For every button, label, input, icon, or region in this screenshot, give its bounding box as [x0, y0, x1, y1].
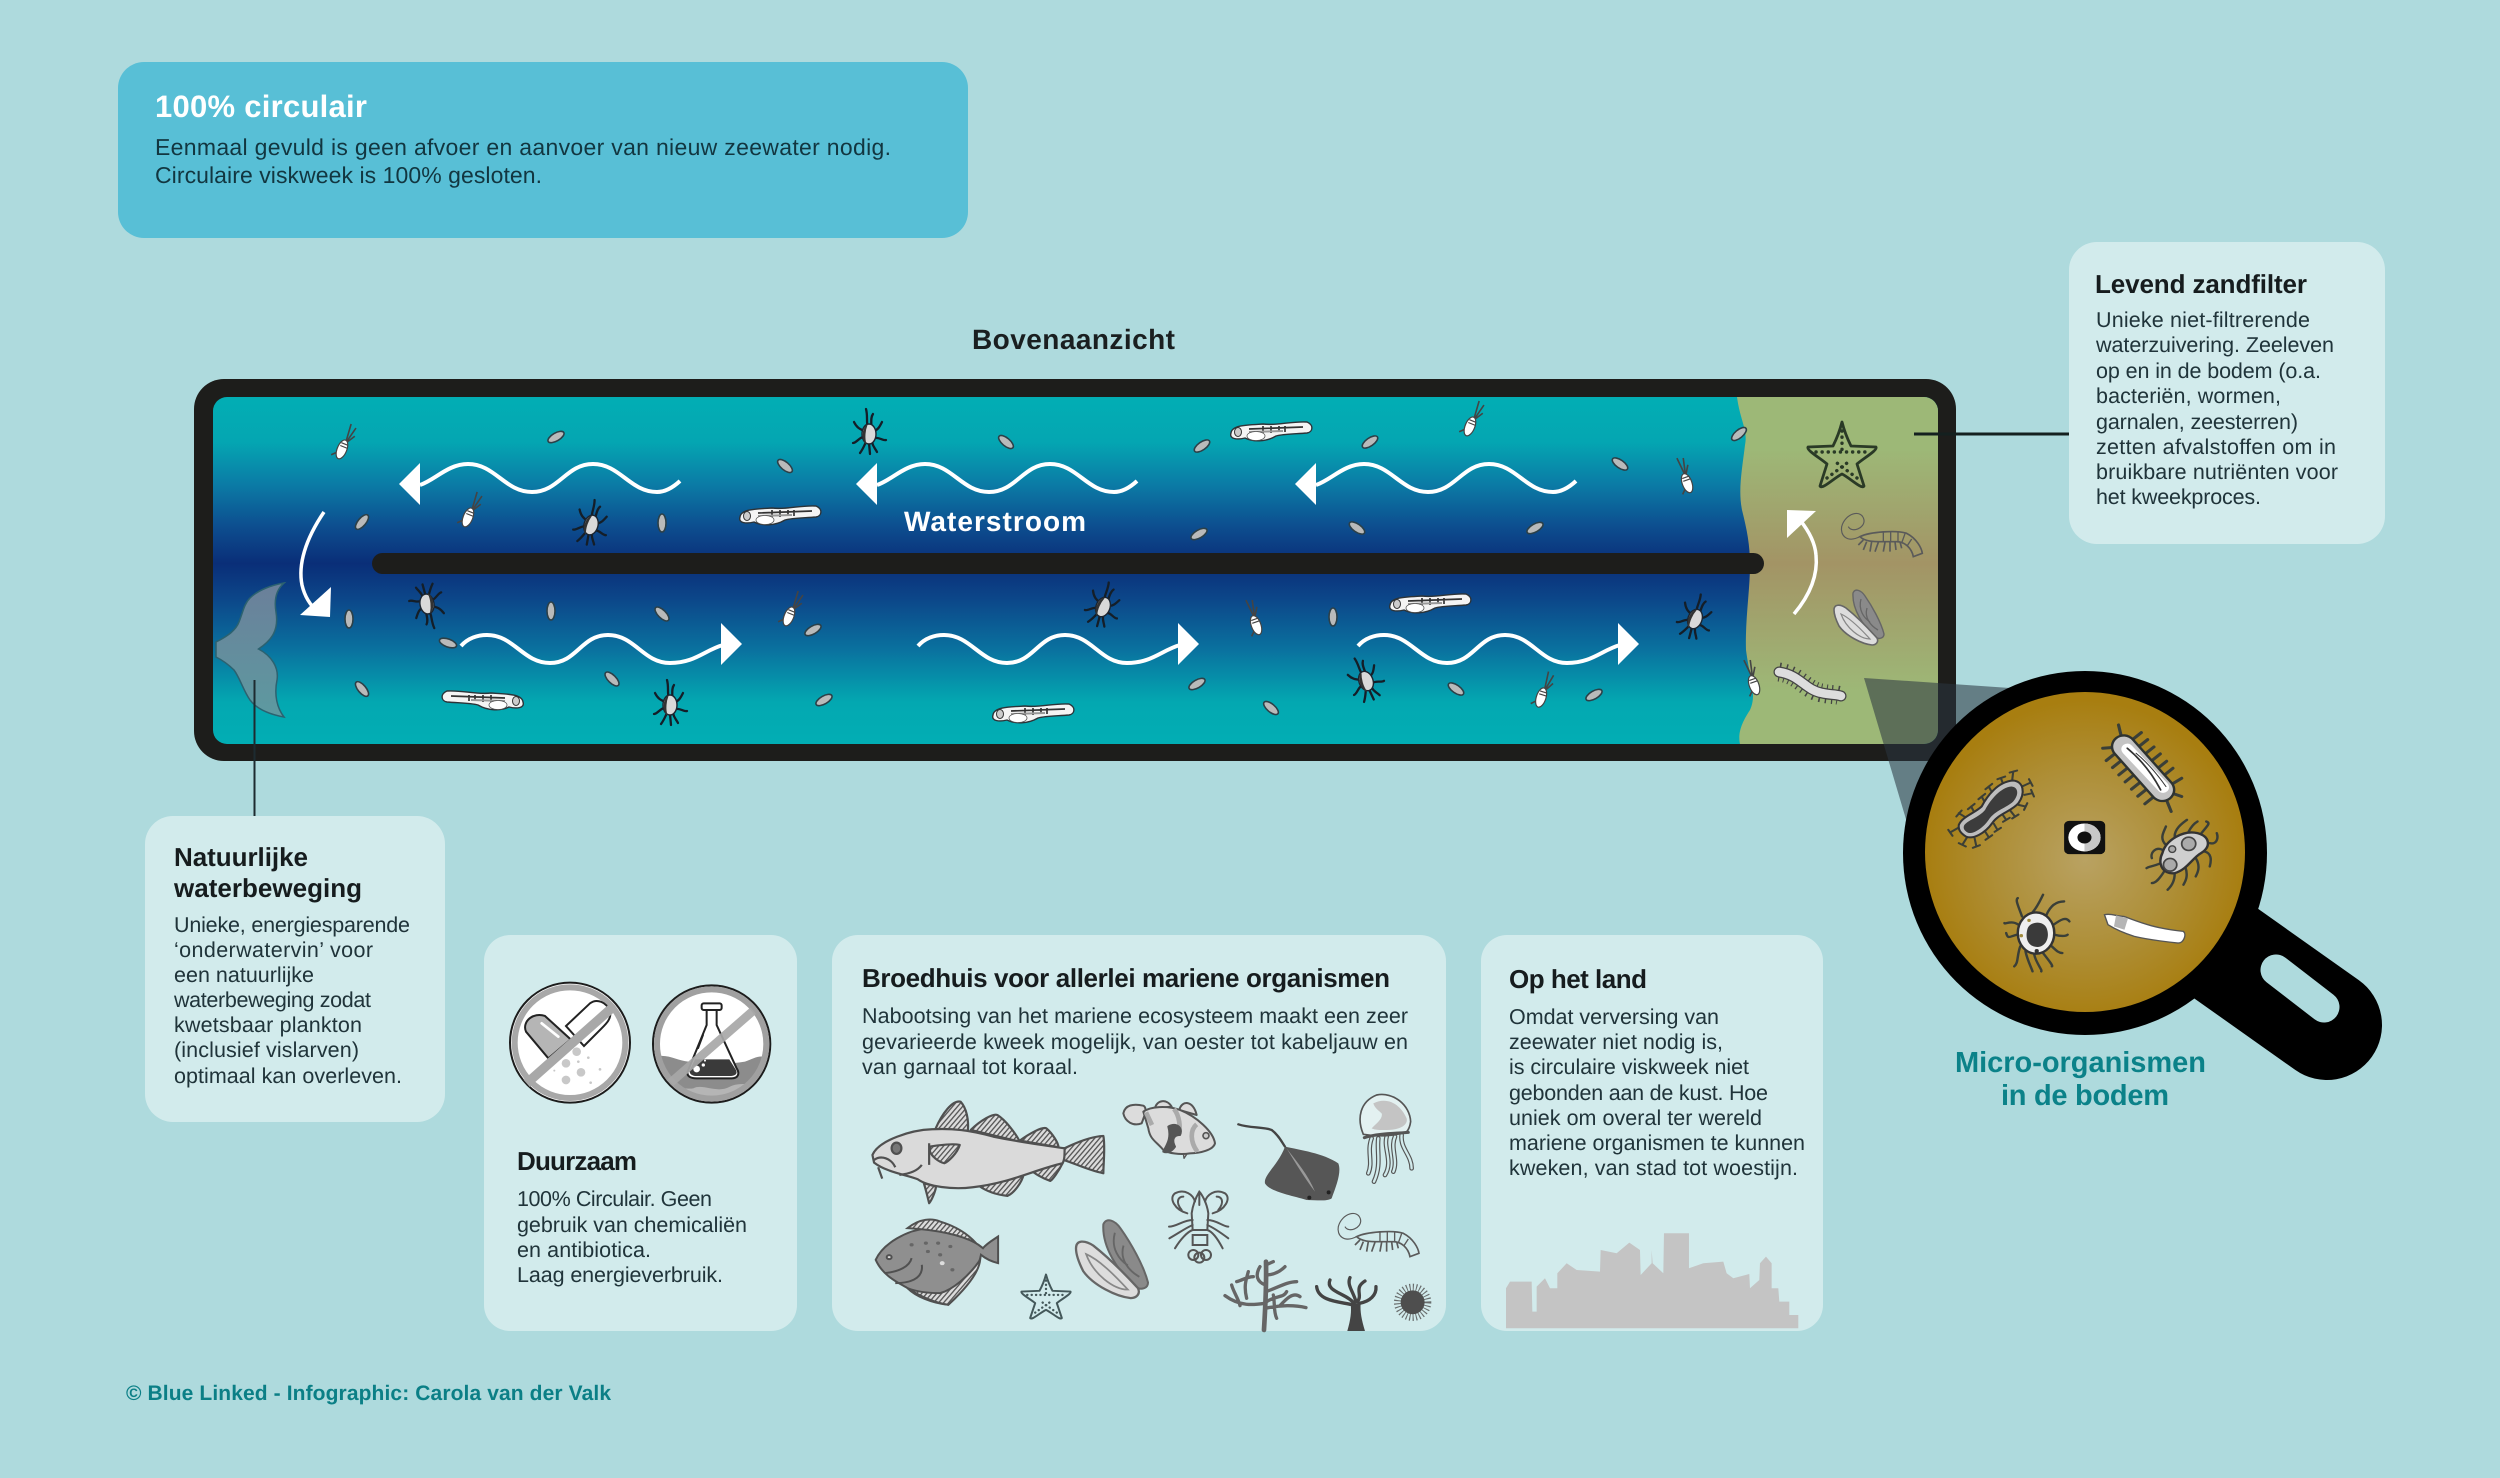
jellyfish	[1360, 1094, 1412, 1182]
text: circulair description: Circulaire viskweek is 100% gesloten.	[155, 162, 542, 188]
body text: (inclusief vislarven)	[174, 1038, 359, 1062]
icon: underwater fin	[216, 583, 284, 717]
body text: op en in de bodem (o.a.	[2096, 359, 2321, 383]
mussel	[1076, 1220, 1148, 1298]
body text: kweken, van stad tot woestijn.	[1509, 1156, 1798, 1180]
plankton: seeds	[345, 425, 1748, 717]
arrows: bottom row flow	[461, 623, 1639, 665]
label: Micro-organismen in de bodem: Micro-organismen	[1955, 1047, 2206, 1079]
body text: waterbeweging zodat	[173, 988, 371, 1012]
body text: uniek om overal ter wereld	[1509, 1106, 1762, 1130]
microbe: amoeba	[2004, 895, 2069, 971]
lobster	[1169, 1192, 1228, 1263]
icon: shrimp	[1841, 513, 1922, 557]
heading: Bovenaanzicht: Bovenaanzicht	[972, 324, 1175, 355]
heading: Natuurlijke	[174, 842, 308, 872]
body text: een natuurlijke	[174, 963, 314, 987]
label: Waterstroom: Waterstroom	[904, 506, 1086, 537]
plankton: fish larvae	[442, 422, 1471, 723]
microbe: dumbbell	[1948, 771, 2034, 848]
icon: worm	[1779, 672, 1841, 696]
body text: kwetsbaar plankton	[174, 1013, 362, 1037]
body text: bruikbare nutriënten voor	[2096, 460, 2338, 484]
panel: Natuurlijke waterbeweging	[145, 816, 445, 1122]
connector line: sand to label	[1914, 432, 2070, 436]
microbes	[1948, 725, 2217, 971]
body text: zeewater niet nodig is,	[1509, 1030, 1723, 1054]
marine organisms: fish	[872, 1102, 1104, 1305]
body text	[173, 913, 410, 1088]
label: Micro-organismen in de bodem: in de bodem	[2001, 1080, 2169, 1112]
panel: Duurzaam	[484, 935, 797, 1331]
magnifier	[1903, 671, 2327, 1035]
icon: mussel	[1834, 590, 1884, 645]
center lens icon	[2064, 821, 2105, 854]
body text: gebruik van chemicaliën	[517, 1213, 747, 1237]
panel: Broedhuis	[832, 935, 1446, 1331]
sand filter zone	[1737, 397, 1938, 744]
body text: en antibiotica.	[517, 1238, 651, 1262]
heading: Levend zandfilter	[2095, 269, 2307, 299]
heading: Duurzaam	[517, 1146, 637, 1176]
coral tree	[1317, 1278, 1376, 1331]
heading: waterbeweging	[173, 873, 362, 903]
body text: het kweekproces.	[2096, 485, 2261, 509]
heading	[173, 842, 362, 903]
coral branching	[1225, 1262, 1306, 1330]
body text: gevarieerde kweek mogelijk, van oester tot kabeljauw en	[862, 1030, 1408, 1054]
body text: garnalen, zeesterren)	[2096, 410, 2298, 434]
label: Micro-organismen in de bodem	[1955, 1047, 2206, 1112]
body text: Omdat verversing van	[1509, 1005, 1719, 1029]
arrows: top row flow	[399, 463, 1576, 505]
center wall	[372, 553, 1764, 574]
body text: 100% Circulair. Geen	[517, 1187, 712, 1211]
shrimp	[1338, 1213, 1419, 1257]
clownfish	[1123, 1101, 1215, 1158]
flounder	[876, 1220, 998, 1305]
body text: Nabootsing van het mariene ecosysteem maakt een zeer	[862, 1004, 1408, 1028]
footer credit: © Blue Linked - Infographic: Carola van der Valk	[126, 1382, 611, 1405]
text: circulair description: Eenmaal gevuld is geen afvoer en aanvoer van nieuw zeewater nodig.	[155, 134, 891, 160]
body text: gebonden aan de kust. Hoe	[1509, 1081, 1768, 1105]
body text: Unieke niet-filtrerende	[2096, 308, 2310, 332]
microbe: kidney	[2147, 820, 2217, 890]
body text: bacteriën, wormen,	[2096, 384, 2281, 408]
body text	[517, 1187, 747, 1287]
heading: Op het land	[1509, 964, 1647, 994]
icon: no antibiotics	[510, 983, 630, 1103]
plankton: spiders	[407, 409, 1720, 725]
body text: waterzuivering. Zeeleven	[2095, 333, 2334, 357]
body text	[2095, 308, 2338, 509]
marine organisms: small creatures	[1123, 1094, 1427, 1331]
handle	[2190, 928, 2327, 1025]
icon: no chemicals	[653, 985, 770, 1110]
connector line: fin to label	[254, 680, 256, 816]
city skyline	[1506, 1233, 1798, 1328]
panel: 100% circulair	[118, 62, 968, 238]
body text	[1509, 1005, 1805, 1180]
body text: is circulaire viskweek niet	[1509, 1055, 1749, 1079]
plankton: copepods	[331, 398, 1764, 709]
body text: Laag energieverbruik.	[517, 1263, 723, 1287]
arrow: right curve	[1787, 510, 1816, 614]
body text: Unieke, energiesparende	[174, 913, 410, 937]
body text: ‘onderwatervin’ voor	[174, 938, 373, 962]
heading: Broedhuis voor allerlei mariene organismen	[862, 963, 1390, 993]
sea urchin	[1399, 1288, 1427, 1316]
body text: van garnaal tot koraal.	[862, 1055, 1078, 1079]
text: circulair description	[155, 134, 891, 188]
panel: Op het land	[1481, 935, 1823, 1331]
microbe: white worm	[2104, 914, 2185, 943]
body text: optimaal kan overleven.	[174, 1064, 402, 1088]
arrow: left curve	[300, 512, 331, 617]
cod	[872, 1102, 1104, 1203]
icon: starfish	[1808, 422, 1876, 487]
starfish	[1021, 1275, 1071, 1319]
panel: Levend zandfilter	[2069, 242, 2385, 544]
magnifier beam	[1864, 678, 2010, 826]
body text: mariene organismen te kunnen	[1509, 1131, 1805, 1155]
tank top view	[194, 379, 1956, 761]
body text: zetten afvalstoffen om in	[2096, 435, 2336, 459]
stingray	[1238, 1124, 1339, 1200]
heading: 100% circulair: 100% circulair	[155, 89, 367, 124]
microbe: rod	[2103, 725, 2182, 812]
body text	[862, 1004, 1408, 1079]
